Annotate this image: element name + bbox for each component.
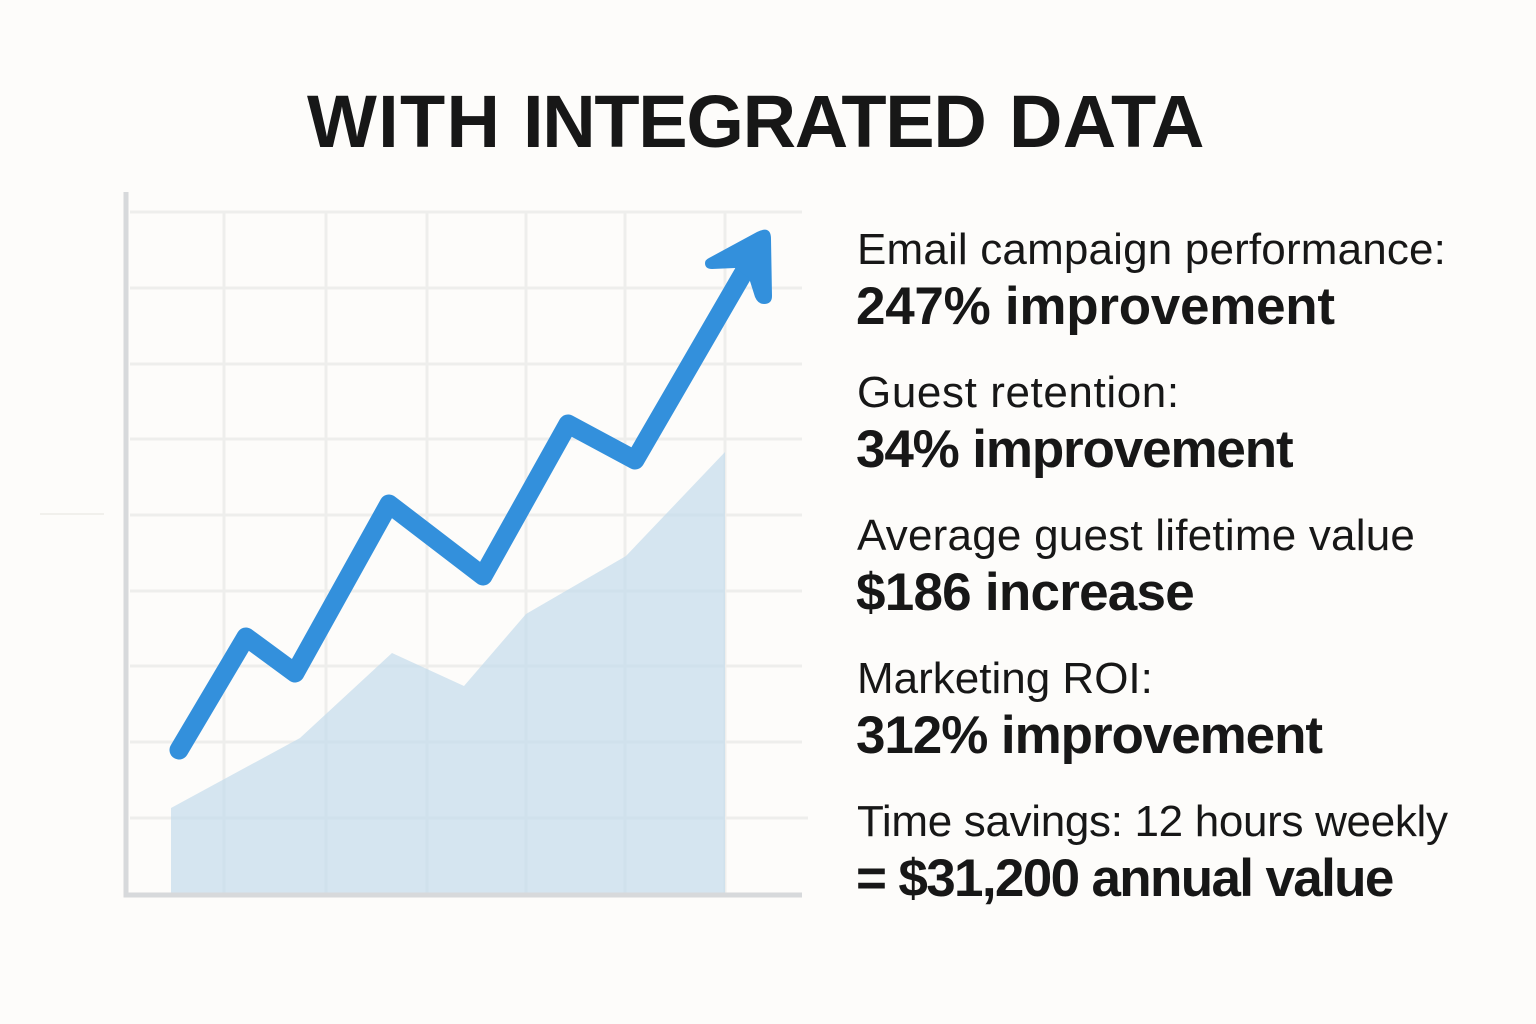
stat: lifetime value: Average guest lifetime value: [857, 511, 1415, 560]
stat: retention: [856, 368, 1293, 479]
stat: lifetime value: $186 increase: [856, 563, 1194, 622]
stat: time savings: = $31,200 annual value: [856, 849, 1393, 908]
trend line: [179, 272, 744, 750]
arrow head: [705, 230, 772, 304]
stat: ROI: [856, 654, 1322, 765]
stat: email: [856, 225, 1446, 336]
chart axes: [126, 192, 802, 895]
stat: lifetime value: [856, 511, 1415, 622]
stat: time savings: Time savings: 12 hours weekly: [857, 797, 1448, 846]
title: INTEGRATED: [523, 80, 986, 163]
stat: ROI: 312% improvement: [856, 706, 1322, 765]
stat: retention: Guest retention:: [857, 368, 1180, 417]
stat: retention: 34% improvement: [856, 420, 1293, 479]
title: WITH: [307, 80, 501, 163]
area series: [171, 452, 725, 893]
title: [307, 80, 1205, 163]
title: DATA: [1009, 80, 1205, 163]
stat: email: Email campaign performance:: [857, 225, 1446, 274]
stat: ROI: Marketing ROI:: [857, 654, 1153, 703]
stat: email: 247% improvement: [856, 277, 1335, 336]
stat: time savings: [856, 797, 1448, 908]
